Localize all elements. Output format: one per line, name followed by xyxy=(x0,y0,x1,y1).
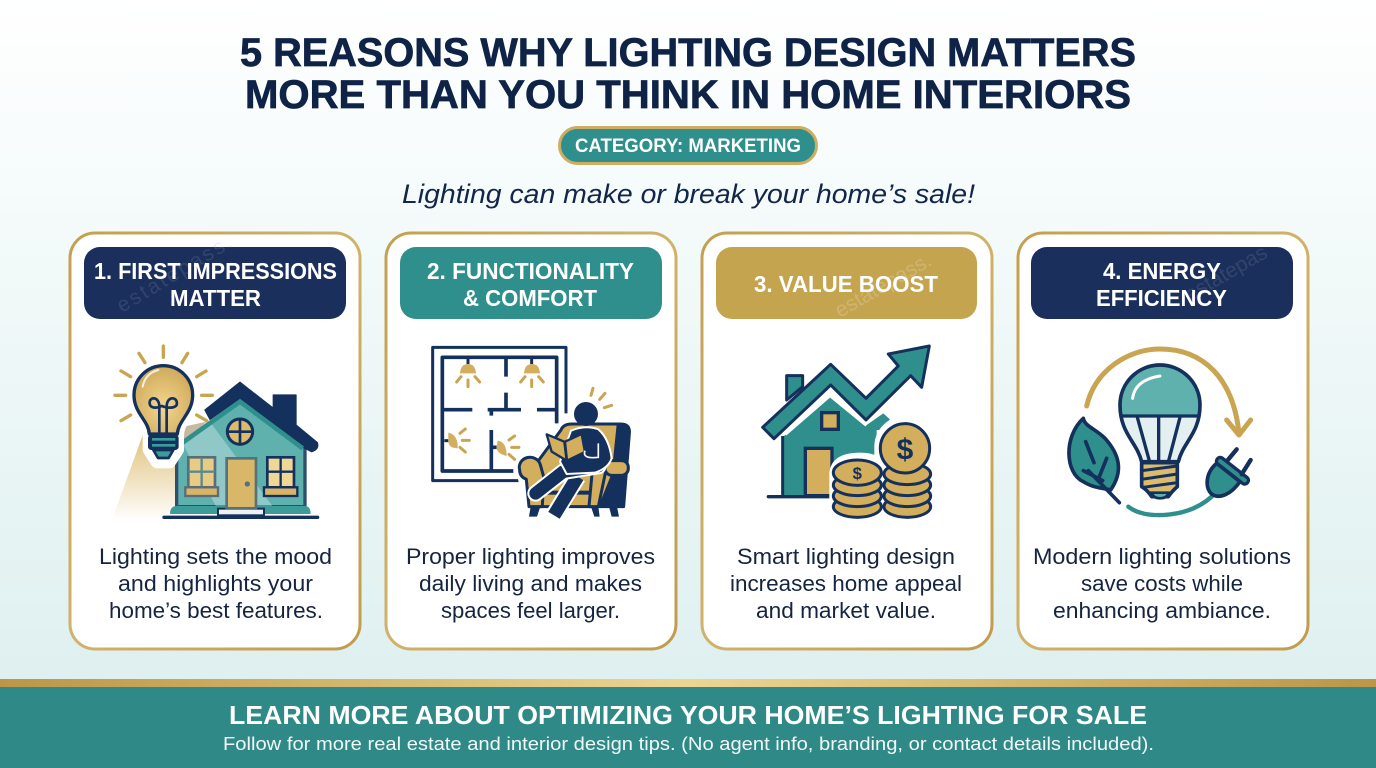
category badge: CATEGORY: MARKETING xyxy=(575,136,801,157)
category badge xyxy=(560,128,816,164)
header: first impressions: estatepass. xyxy=(113,231,236,317)
header: first impressions: MATTER xyxy=(170,285,261,311)
header: value boost: 3. VALUE BOOST xyxy=(754,271,938,297)
description: value boost: Smart lighting design xyxy=(737,544,955,569)
footer note: Follow for more real estate and interior design tips. (No agent info, branding, or contact details included). xyxy=(223,734,1154,754)
panel: functionality and comfort xyxy=(386,233,676,649)
description: energy efficiency: enhancing ambiance. xyxy=(1053,598,1271,623)
header: first impressions: 1. FIRST IMPRESSIONS xyxy=(94,258,337,284)
description: value boost: and market value. xyxy=(756,598,936,623)
footer banner xyxy=(0,679,1376,768)
description: first impressions: Lighting sets the mood xyxy=(99,544,332,569)
header: functionality and comfort xyxy=(400,247,662,319)
header: functionality and comfort: 2. FUNCTIONALITY xyxy=(427,258,634,284)
panel: value boost xyxy=(702,233,992,649)
description: first impressions: home’s best features. xyxy=(109,598,323,623)
card background xyxy=(1018,233,1308,649)
header: energy efficiency: 4. ENERGY xyxy=(1103,258,1221,284)
description: functionality and comfort xyxy=(406,544,655,623)
header: value boost: estatepass. xyxy=(831,249,936,322)
description: first impressions xyxy=(99,544,332,623)
header: value boost xyxy=(716,247,977,322)
description: functionality and comfort: daily living and makes xyxy=(419,571,642,596)
header: energy efficiency: EFFICIENCY xyxy=(1096,285,1227,311)
icon: LED bulb, leaf and plug cycle xyxy=(1069,349,1251,515)
header: first impressions xyxy=(84,231,346,319)
title xyxy=(240,31,1136,117)
card background xyxy=(702,233,992,649)
footer heading: LEARN MORE ABOUT OPTIMIZING YOUR HOME’S LIGHTING FOR SALE xyxy=(229,700,1147,730)
card background xyxy=(70,233,360,649)
icon: glowing bulb and house xyxy=(112,346,318,521)
icon: house, rising arrow and coins: $ xyxy=(853,464,863,483)
header: functionality and comfort: & COMFORT xyxy=(463,285,597,311)
icon: floor plan and reader in armchair xyxy=(433,347,629,517)
card background xyxy=(386,233,676,649)
title: 5 REASONS WHY LIGHTING DESIGN MATTERS xyxy=(240,31,1136,75)
title: MORE THAN YOU THINK IN HOME INTERIORS xyxy=(245,73,1131,117)
description: functionality and comfort: Proper lighting improves xyxy=(406,544,655,569)
description: energy efficiency xyxy=(1033,544,1291,623)
description: energy efficiency: save costs while xyxy=(1081,571,1243,596)
reader figure xyxy=(536,402,612,515)
panel: energy efficiency xyxy=(1018,233,1308,649)
header: energy efficiency: estatepas xyxy=(1181,241,1271,306)
description: first impressions: and highlights your xyxy=(118,571,313,596)
description: energy efficiency: Modern lighting solutions xyxy=(1033,544,1291,569)
description: value boost xyxy=(730,544,962,623)
tagline: Lighting can make or break your home’s sale! xyxy=(402,179,976,209)
panel: first impressions xyxy=(70,231,360,649)
description: functionality and comfort: spaces feel larger. xyxy=(441,598,620,623)
header: energy efficiency xyxy=(1031,241,1293,319)
description: value boost: increases home appeal xyxy=(730,571,962,596)
icon: house, rising arrow and coins xyxy=(763,346,933,520)
icon: house, rising arrow and coins: $ xyxy=(897,433,914,466)
